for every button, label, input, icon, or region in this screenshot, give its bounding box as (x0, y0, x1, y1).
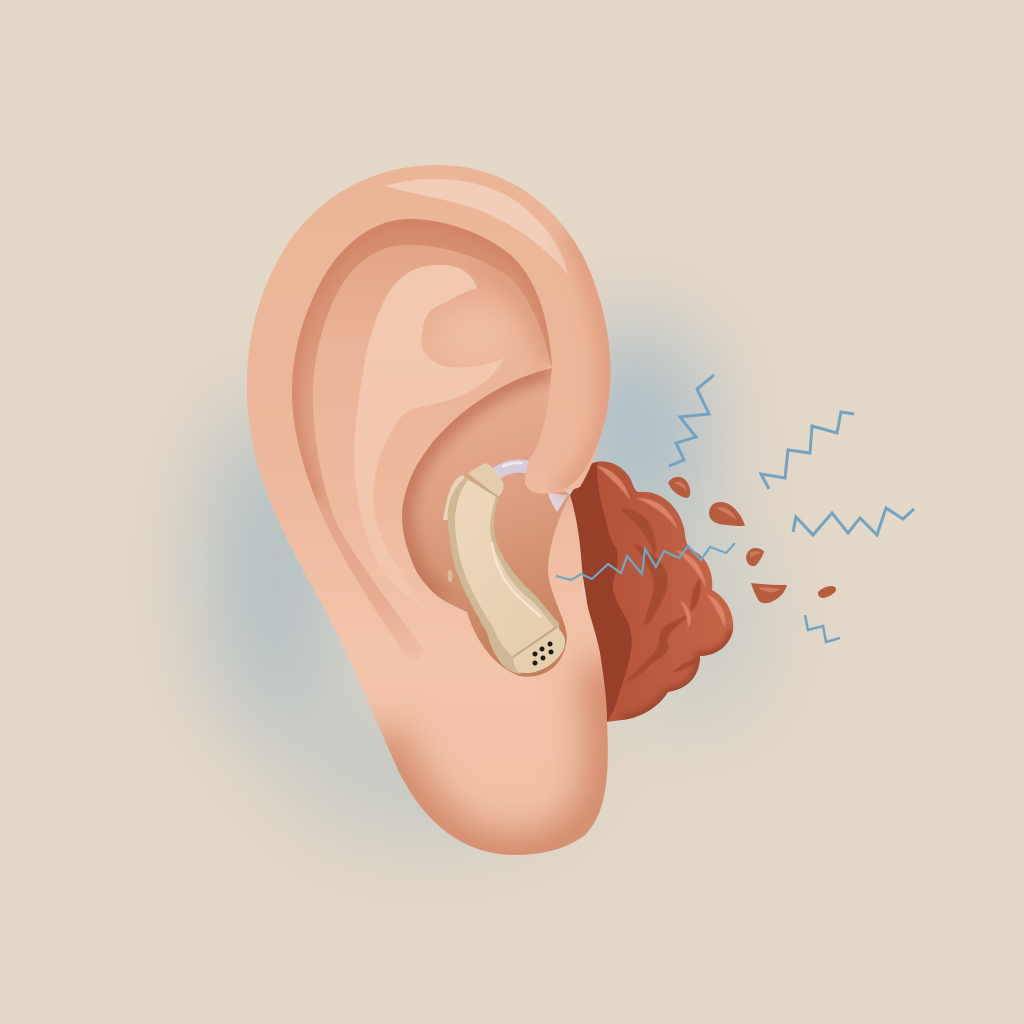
wax shading and folds (560, 462, 733, 722)
ear: antihelix light body (355, 265, 505, 612)
microphone holes (532, 642, 554, 666)
wax fragments (668, 477, 836, 603)
earwax mass (560, 461, 733, 722)
sound waves bouncing away (669, 375, 914, 642)
body face (455, 480, 554, 657)
wax dark inner shade (570, 462, 632, 722)
ear: helix flap overlapping cavity (525, 340, 606, 494)
ear: concha cavity (402, 368, 570, 677)
side button (448, 570, 452, 582)
wax folds (622, 508, 701, 682)
ear: scapha groove (292, 219, 552, 650)
hearing aid body (443, 463, 565, 674)
highlight (492, 543, 540, 616)
sound wave through ear canal (556, 543, 735, 580)
ear: outer shape (247, 165, 611, 855)
bottom cap (513, 627, 565, 673)
fragment highlights (674, 482, 781, 592)
ear: edge shading (380, 230, 611, 860)
back rim (443, 475, 465, 520)
body outline (448, 477, 560, 674)
illustration: ear with hearing aid and earwax blockage (160, 165, 915, 870)
wave 1 (669, 375, 714, 466)
wave 2 (761, 412, 854, 489)
background glow: blue halo behind ear (210, 325, 770, 840)
hearing aid tube (494, 463, 568, 512)
wave 3 (793, 508, 914, 535)
helix top highlight (385, 179, 568, 275)
ear: antihelix middle band (330, 245, 550, 368)
wave 4 (805, 615, 840, 642)
wax highlights (597, 466, 726, 628)
top cap (468, 463, 504, 497)
